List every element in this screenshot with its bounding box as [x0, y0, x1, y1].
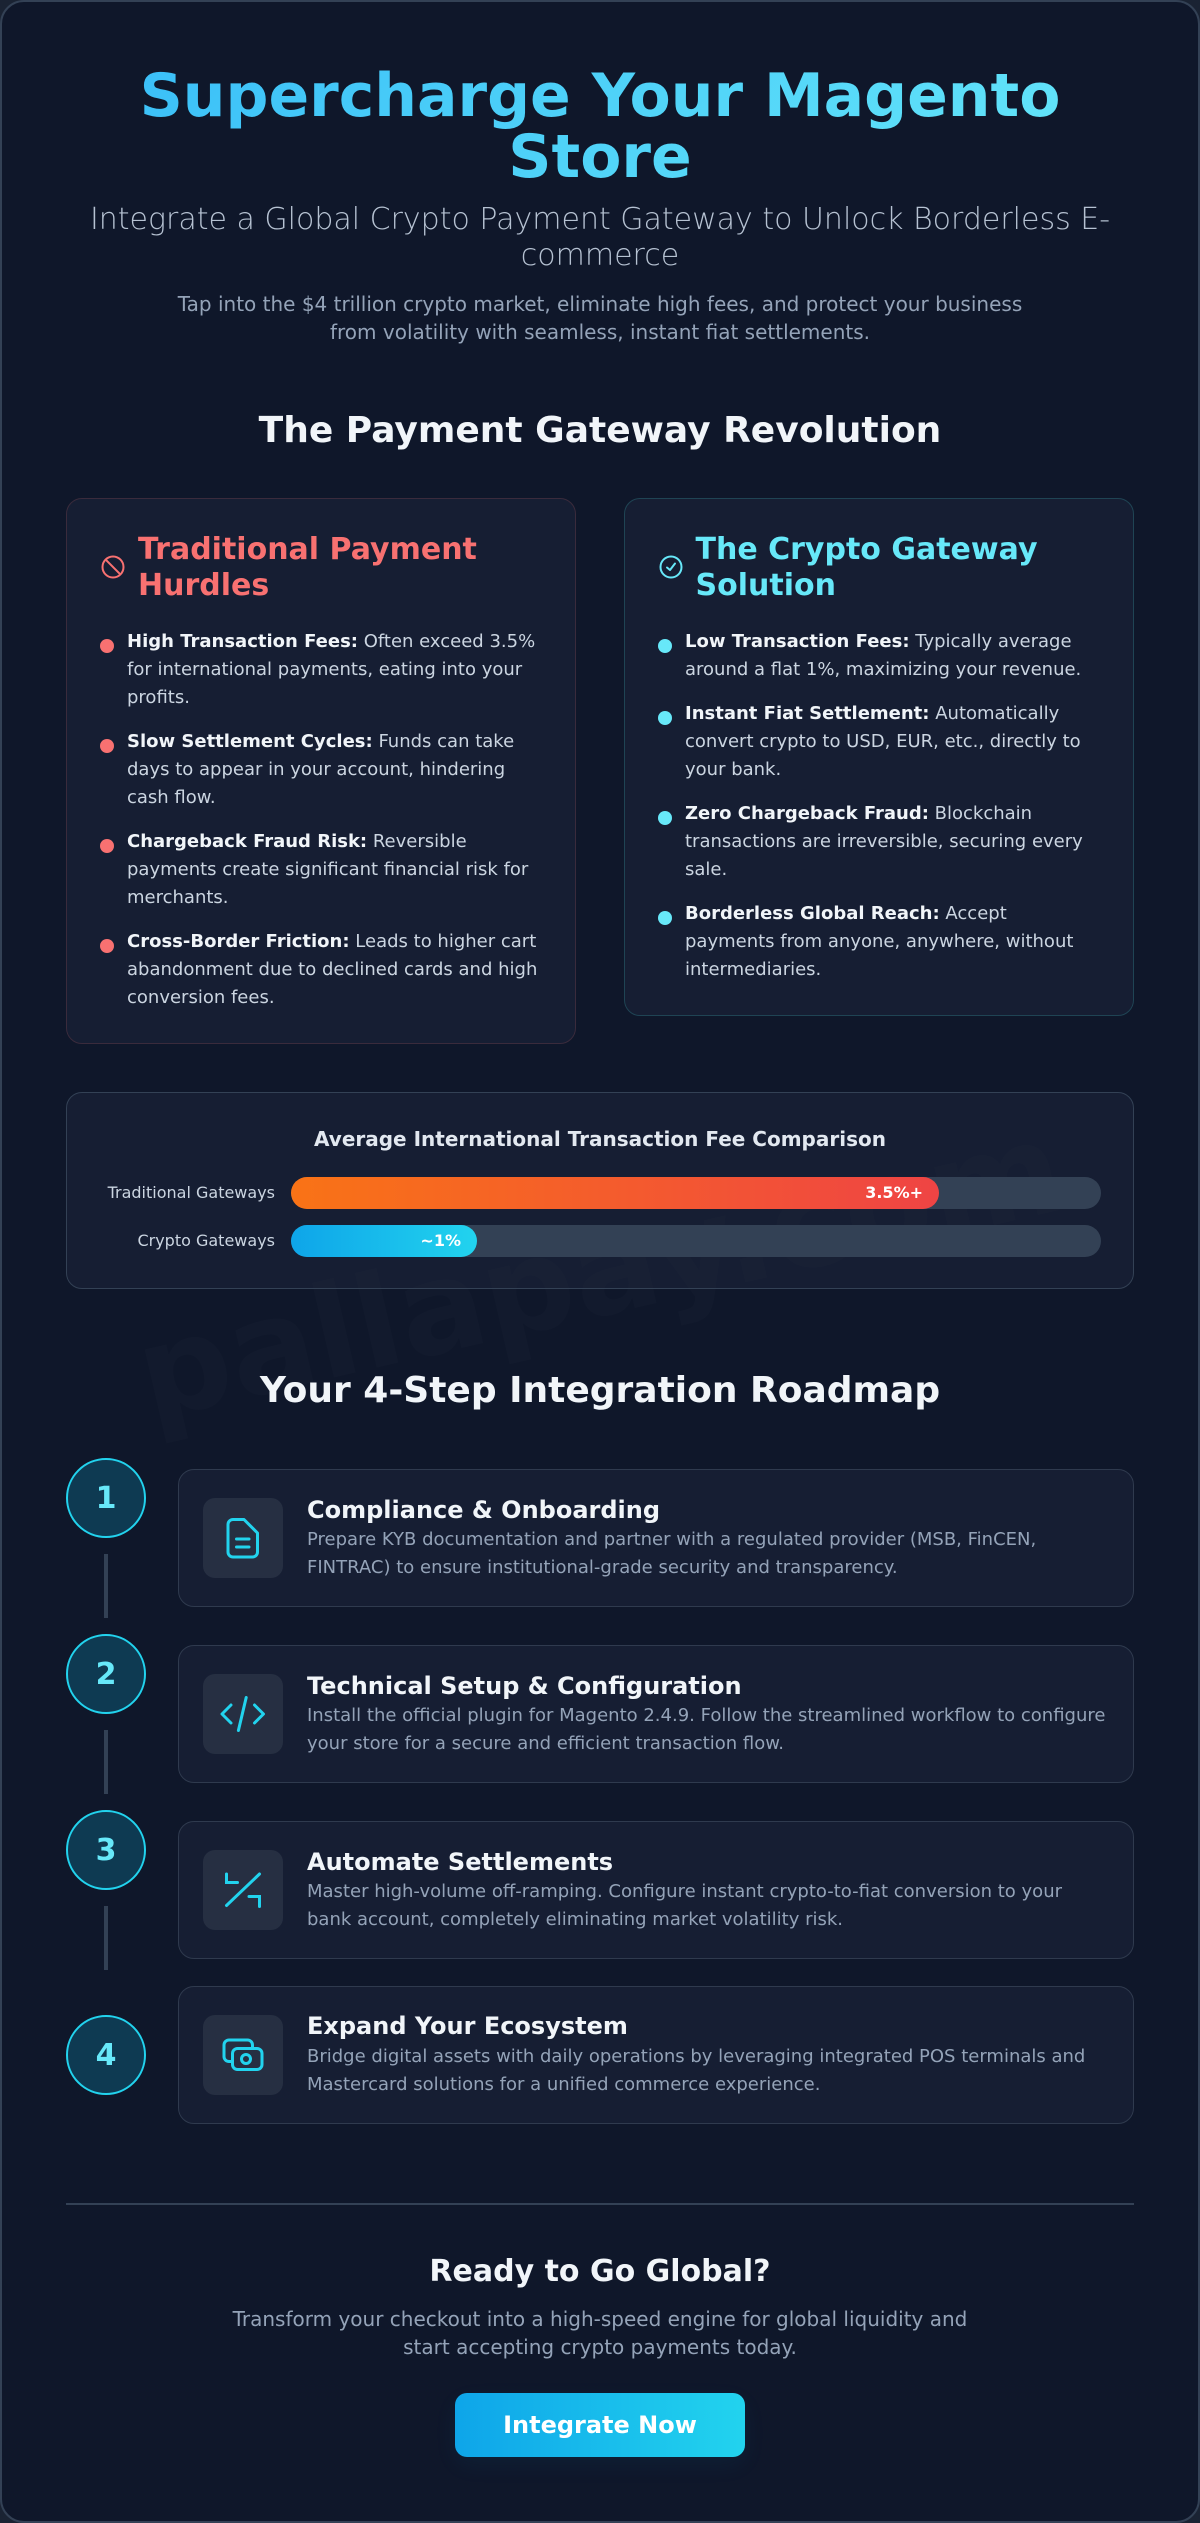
button: integrate now: Integrate Now [503, 2411, 697, 2439]
step number 4: 4 [96, 2038, 116, 2073]
connector 2 [104, 1730, 108, 1794]
list item: instant fiat settlement: Instant Fiat Settlement: Automatically [685, 703, 1059, 724]
list item: cross-border friction: conversion fees. [127, 987, 275, 1008]
bullet [658, 911, 672, 925]
list item: high transaction fees: High Transaction Fees: Often exceed 3.5% [127, 631, 535, 652]
list item: borderless global reach [685, 903, 1073, 980]
panel: traditional payment hurdles [66, 498, 576, 1044]
bullet [100, 839, 114, 853]
section heading: integration roadmap: Your 4-Step Integration Roadmap [260, 1370, 940, 1411]
list item: zero chargeback fraud: Zero Chargeback Fraud: Blockchain [685, 803, 1032, 824]
icon: conversion [203, 1850, 283, 1930]
step number 1 [66, 1458, 146, 1538]
closing paragraph: start accepting crypto payments today. [403, 2335, 797, 2359]
subtitle: commerce [521, 238, 679, 273]
step description 2 [307, 1705, 1105, 1754]
list item: zero chargeback fraud: transactions are irreversible, securing every [685, 831, 1083, 852]
subtitle: Integrate a Global Crypto Payment Gateway to Unlock Borderless E- [90, 202, 1110, 237]
bar: traditional 3.5%+: 3.5%+ [865, 1183, 923, 1202]
closing heading: Ready to Go Global? [429, 2254, 771, 2289]
step title 4: Expand Your Ecosystem [307, 2012, 628, 2040]
step description 3: bank account, completely eliminating market volatility risk. [307, 1909, 843, 1930]
step card 3 [178, 1821, 1134, 1959]
list item: zero chargeback fraud: sale. [685, 859, 727, 880]
step card 1 [178, 1469, 1134, 1607]
list item: cross-border friction: abandonment due to declined cards and high [127, 959, 537, 980]
list item: cross-border friction: Cross-Border Friction: Leads to higher cart [127, 931, 536, 952]
divider [66, 2203, 1134, 2205]
list item: cross-border friction [127, 931, 537, 1008]
step card 4 [178, 1986, 1134, 2124]
list item: chargeback fraud risk [127, 831, 528, 908]
list item: slow settlement cycles: cash flow. [127, 787, 216, 808]
icon: check circle [660, 556, 682, 578]
section heading: the payment gateway revolution: The Payment Gateway Revolution [259, 410, 941, 451]
list item: chargeback fraud risk: payments create significant financial risk for [127, 859, 528, 880]
chart title: Average International Transaction Fee Comparison [314, 1127, 886, 1151]
step description 3: Master high-volume off-ramping. Configure instant crypto-to-fiat conversion to your [307, 1881, 1062, 1902]
bullet [658, 639, 672, 653]
step description 3 [307, 1881, 1062, 1930]
step card 2 [178, 1645, 1134, 1783]
list item: instant fiat settlement: convert crypto to USD, EUR, etc., directly to [685, 731, 1081, 752]
list item: chargeback fraud risk: merchants. [127, 887, 229, 908]
title: Store [508, 122, 692, 192]
list item: low transaction fees: around a flat 1%, maximizing your revenue. [685, 659, 1081, 680]
list item: chargeback fraud risk: Chargeback Fraud Risk: Reversible [127, 831, 467, 852]
list item: instant fiat settlement [685, 703, 1081, 780]
step number 2 [66, 1634, 146, 1714]
heading: the crypto gateway solution: Solution [696, 568, 836, 603]
step description 4: Mastercard solutions for a unified commerce experience. [307, 2074, 820, 2095]
list item: borderless global reach: intermediaries. [685, 959, 821, 980]
icon: document [203, 1498, 283, 1578]
icon: ban [102, 556, 124, 578]
step description 2: your store for a secure and efficient transaction flow. [307, 1733, 784, 1754]
button: integrate now [455, 2393, 745, 2457]
list item: borderless global reach: Borderless Global Reach: Accept [685, 903, 1007, 924]
step title 2: Technical Setup & Configuration [307, 1672, 742, 1700]
bar track: crypto [291, 1225, 1101, 1257]
step description 1 [307, 1529, 1036, 1578]
title: Supercharge Your Magento [140, 61, 1060, 131]
bar: crypto ~1%: ~1% [420, 1231, 461, 1250]
step title 1: Compliance & Onboarding [307, 1496, 660, 1524]
step number 4 [66, 2015, 146, 2095]
step number 1: 1 [96, 1481, 116, 1516]
heading: the crypto gateway solution: The Crypto Gateway [696, 532, 1038, 567]
intro paragraph: from volatility with seamless, instant fiat settlements. [330, 320, 870, 344]
step number 3 [66, 1810, 146, 1890]
connector 3 [104, 1906, 108, 1970]
step description 1: FINTRAC) to ensure institutional-grade security and transparency. [307, 1557, 898, 1578]
bar label: traditional gateways: Traditional Gateways [108, 1183, 275, 1202]
icon: cash [203, 2015, 283, 2095]
intro paragraph: Tap into the $4 trillion crypto market, eliminate high fees, and protect your business [178, 292, 1022, 316]
closing paragraph: Transform your checkout into a high-speed engine for global liquidity and [233, 2307, 967, 2331]
bar label: crypto gateways: Crypto Gateways [137, 1231, 275, 1250]
list item: slow settlement cycles [127, 731, 514, 808]
icon: code [203, 1674, 283, 1754]
bar: crypto ~1% [291, 1225, 477, 1257]
list item: high transaction fees [127, 631, 535, 708]
panel: fee comparison bar chart [66, 1092, 1134, 1289]
bar: traditional 3.5%+ [291, 1177, 939, 1209]
bullet [658, 711, 672, 725]
list item: instant fiat settlement: your bank. [685, 759, 781, 780]
heading: traditional payment hurdles: Traditional Payment [138, 532, 477, 567]
list item: high transaction fees: profits. [127, 687, 190, 708]
step description 4 [307, 2046, 1085, 2095]
step title 3: Automate Settlements [307, 1848, 613, 1876]
watermark: pallapay.com [123, 1093, 1076, 1450]
connector 1 [104, 1554, 108, 1618]
panel: the crypto gateway solution [624, 498, 1134, 1016]
closing paragraph [232, 2307, 967, 2359]
heading: traditional payment hurdles [138, 532, 477, 603]
list item: zero chargeback fraud [685, 803, 1083, 880]
list item: low transaction fees [685, 631, 1081, 680]
heading: the crypto gateway solution [696, 532, 1038, 603]
step description 2: Install the official plugin for Magento 2.4.9. Follow the streamlined workflow to configure [307, 1705, 1105, 1726]
step number 3: 3 [96, 1833, 116, 1868]
list item: borderless global reach: payments from anyone, anywhere, without [685, 931, 1073, 952]
list item: slow settlement cycles: days to appear in your account, hindering [127, 759, 505, 780]
heading: traditional payment hurdles: Hurdles [138, 568, 269, 603]
list item: low transaction fees: Low Transaction Fees: Typically average [685, 631, 1072, 652]
step number 2: 2 [96, 1657, 116, 1692]
list item: slow settlement cycles: Slow Settlement Cycles: Funds can take [127, 731, 514, 752]
title [66, 66, 1134, 188]
list item: high transaction fees: for international payments, eating into your [127, 659, 522, 680]
step description 4: Bridge digital assets with daily operations by leveraging integrated POS terminals and [307, 2046, 1085, 2067]
subtitle [90, 202, 1110, 273]
bullet [100, 939, 114, 953]
bullet [658, 811, 672, 825]
step description 1: Prepare KYB documentation and partner with a regulated provider (MSB, FinCEN, [307, 1529, 1036, 1550]
bar track: traditional [291, 1177, 1101, 1209]
bullet [100, 739, 114, 753]
intro paragraph [178, 292, 1022, 344]
bullet [100, 639, 114, 653]
